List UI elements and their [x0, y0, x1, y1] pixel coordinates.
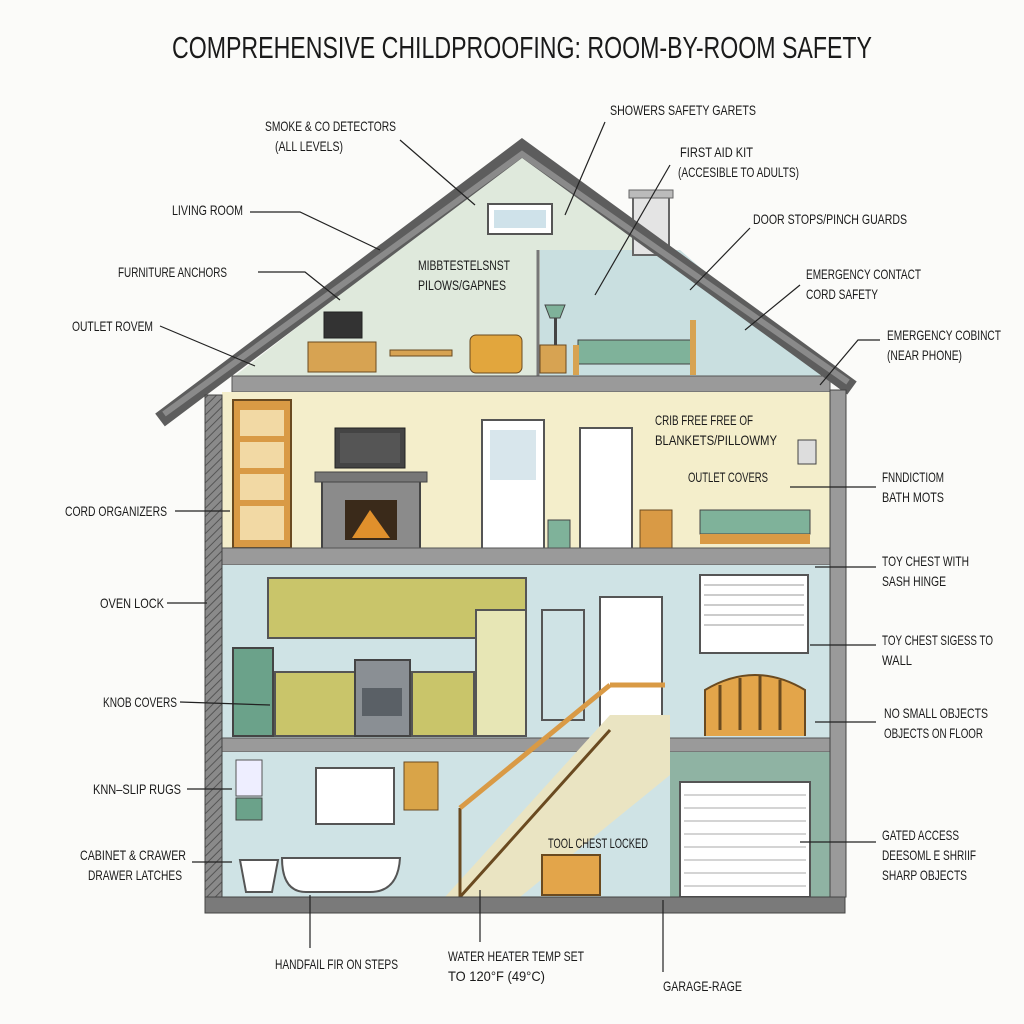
- right callouts: TOY CHEST WITH: [882, 553, 969, 569]
- right callouts: FNNDICTIOM: [882, 469, 944, 485]
- left callouts: (ALL LEVELS): [275, 138, 343, 154]
- right callouts: BATH MOTS: [882, 489, 944, 505]
- bottom callouts: HANDFAIL FIR ON STEPS: [275, 956, 398, 972]
- right callouts: SHOWERS SAFETY GARETS: [610, 102, 756, 118]
- floor 3: kitchen: [222, 565, 830, 738]
- bottom callouts: GARAGE-RAGE: [663, 978, 742, 994]
- right callouts: SASH HINGE: [882, 573, 946, 589]
- interior labels: CRIB FREE FREE OF: [655, 412, 753, 428]
- left callouts: OUTLET ROVEM: [72, 318, 153, 334]
- right callouts: EMERGENCY CONTACT: [806, 266, 921, 282]
- right callouts: WALL: [882, 652, 912, 668]
- left callouts: CABINET & CRAWER: [80, 847, 186, 863]
- right callouts: SHARP OBJECTS: [882, 867, 967, 883]
- right callouts: OBJECTS ON FLOOR: [884, 725, 983, 741]
- right callouts: [565, 102, 1001, 883]
- right callouts: NO SMALL OBJECTS: [884, 705, 988, 721]
- interior labels: [418, 257, 778, 851]
- interior labels: PILOWS/GAPNES: [418, 277, 506, 293]
- interior labels: MIBBTESTELSNST: [418, 257, 510, 273]
- right callouts: DOOR STOPS/PINCH GUARDS: [753, 211, 907, 227]
- bottom callouts: [275, 890, 742, 994]
- right callouts: CORD SAFETY: [806, 286, 878, 302]
- left callouts: KNN–SLIP RUGS: [93, 781, 181, 797]
- right callouts: GATED ACCESS: [882, 827, 959, 843]
- left callouts: FURNITURE ANCHORS: [118, 264, 227, 280]
- left callouts: OVEN LOCK: [100, 595, 165, 611]
- left callouts: LIVING ROOM: [172, 202, 243, 218]
- attic: [232, 152, 830, 378]
- right callouts: (NEAR PHONE): [887, 347, 962, 363]
- left callouts: SMOKE & CO DETECTORS: [265, 118, 396, 134]
- left callouts: DRAWER LATCHES: [88, 867, 182, 883]
- right callouts: FIRST AID KIT: [680, 144, 753, 160]
- interior labels: OUTLET COVERS: [688, 469, 768, 485]
- left callouts: KNOB COVERS: [103, 694, 177, 710]
- floor 4: [222, 685, 830, 897]
- interior labels: TOOL CHEST LOCKED: [548, 835, 648, 851]
- left callouts: [65, 118, 475, 883]
- bottom callouts: WATER HEATER TEMP SET: [448, 948, 584, 964]
- bottom callouts: TO 120°F (49°C): [448, 968, 545, 984]
- house: [160, 148, 852, 913]
- right callouts: DEESOML E SHRIIF: [882, 847, 976, 863]
- floor 2: living room: [222, 392, 830, 550]
- interior labels: BLANKETS/PILLOWMY: [655, 432, 778, 448]
- right callouts: (ACCESIBLE TO ADULTS): [678, 164, 799, 180]
- left callouts: CORD ORGANIZERS: [65, 503, 167, 519]
- roof: [160, 148, 852, 420]
